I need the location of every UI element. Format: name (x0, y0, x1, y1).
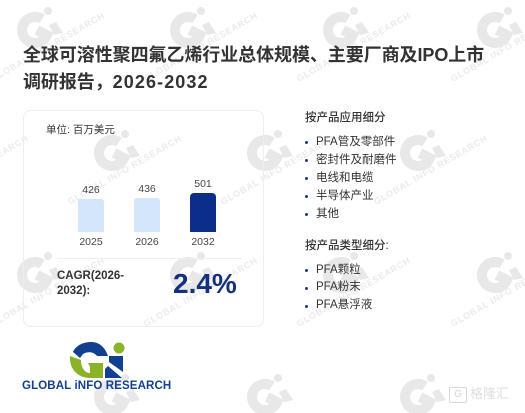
year 2026: 2026 (135, 236, 159, 248)
application items: 半导体产业 (316, 190, 374, 202)
logo: Global Info Research (22, 342, 171, 392)
type items: PFA粉末 (316, 281, 361, 293)
application heading: 按产品应用细分 (305, 112, 386, 124)
divider (57, 258, 241, 259)
watermark pattern: GLOBAL INFO RESEARCH (219, 134, 336, 207)
unit label: 单位: 百万美元 (46, 124, 115, 136)
icon: Gi mark (70, 342, 124, 378)
icon: badge: G (454, 389, 462, 400)
bar chart (78, 178, 216, 248)
application items: 电线和电缆 (316, 172, 374, 184)
badge text: 格隆汇 (470, 386, 509, 401)
watermark pattern: GLOBAL INFO RESEARCH (295, 256, 412, 329)
CAGR label (57, 270, 124, 297)
watermark pattern: GLOBAL INFO RESEARCH (142, 256, 259, 329)
application items: 其他 (316, 208, 339, 220)
bar 2026 (134, 198, 160, 232)
application items: PFA管及零部件 (316, 136, 395, 148)
title: 调研报告，2026-2032 (23, 72, 209, 92)
type items (305, 263, 372, 311)
panel: market size card (23, 110, 264, 327)
logo text: GLOBAL iNFO RESEARCH (22, 380, 171, 392)
watermark pattern: GLOBAL INFO RESEARCH (142, 11, 259, 84)
application items (305, 135, 396, 220)
title (23, 45, 484, 92)
title: 全球可溶性聚四氟乙烯行业总体规模、主要厂商及IPO上市 (23, 45, 484, 65)
CAGR value: 2.4% (173, 268, 237, 299)
watermark pattern: GLOBAL INFO RESEARCH (372, 134, 489, 207)
value 2026: 436 (138, 183, 156, 195)
type items: PFA悬浮液 (316, 299, 372, 311)
icon: badge (449, 387, 467, 403)
type heading: 按产品类型细分: (305, 240, 389, 252)
application items: 密封件及耐磨件 (316, 154, 396, 166)
bar 2025 (78, 199, 104, 232)
year 2025: 2025 (79, 236, 103, 248)
value 2032: 501 (194, 178, 212, 190)
CAGR label: 2032): (57, 285, 90, 297)
watermark pattern: GLOBAL INFO RESEARCH (295, 11, 412, 84)
watermark: source badge (449, 386, 509, 403)
watermark pattern: GLOBAL INFO RESEARCH (66, 134, 183, 207)
year 2032: 2032 (191, 236, 215, 248)
value 2025: 426 (82, 184, 100, 196)
type items: PFA颗粒 (316, 264, 361, 276)
bar 2032 (190, 193, 216, 232)
CAGR label: CAGR(2026- (57, 270, 124, 282)
